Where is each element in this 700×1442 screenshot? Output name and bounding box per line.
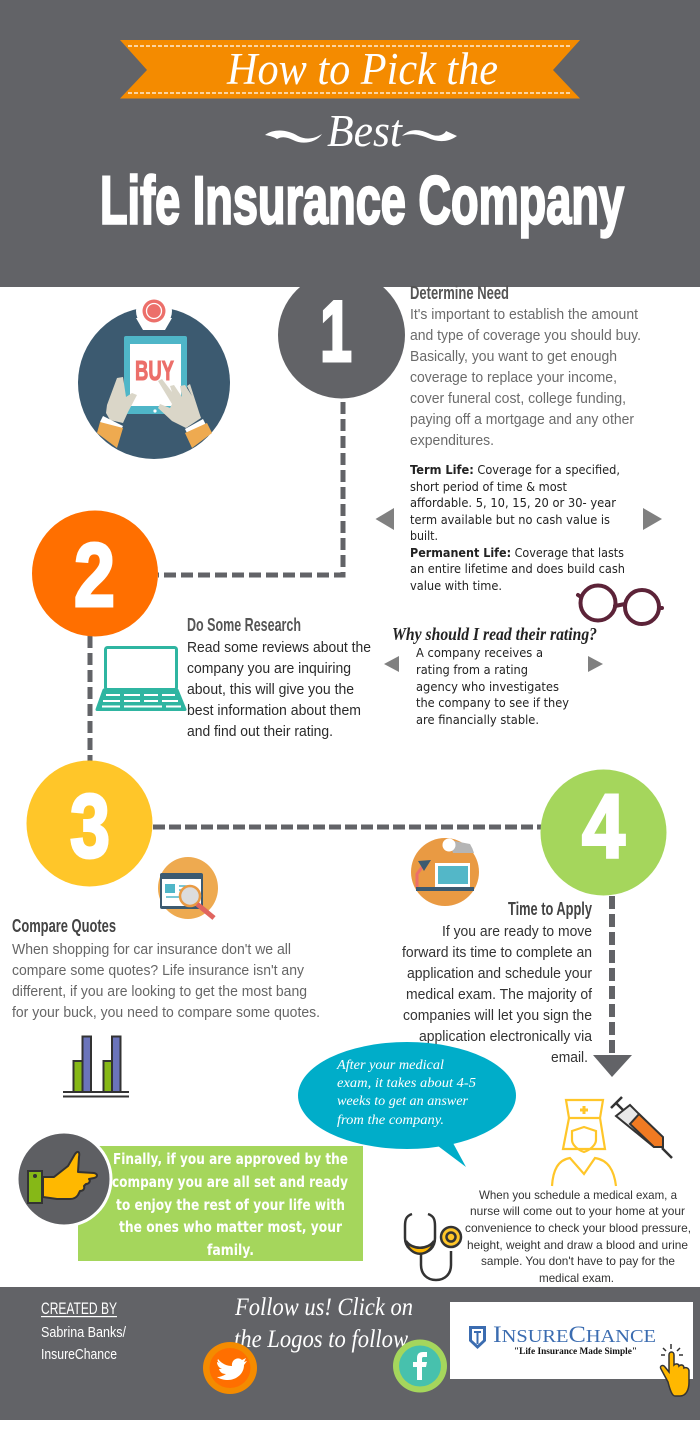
section 1: Determine Need: and type of coverage you should buy.: [410, 328, 641, 344]
section 1: Determine Need: Basically, you want to get enough: [410, 349, 617, 365]
section 2: Do Some Research: Do Some Research: [187, 615, 301, 635]
panel: final message: to enjoy the rest of your life with: [116, 1196, 345, 1214]
arrow: rating left: [384, 656, 399, 672]
credits: Sabrina Banks/: [41, 1324, 127, 1341]
icon: tablet buy: BUY: [135, 355, 174, 386]
panel: final message: company you are all set and ready: [112, 1173, 348, 1191]
arrow: left pointer: [376, 508, 394, 530]
section 1: Determine Need: Determine Need: [410, 283, 509, 303]
step 3 badge: [26, 760, 152, 886]
logo: InsureChance: "Life Insurance Made Simple": [514, 1346, 637, 1356]
title line 1: How to Pick the: [226, 44, 498, 94]
icon: tablet buy: [78, 293, 230, 459]
text block: medical exam: height, weight and draw a blood and urine: [467, 1238, 688, 1252]
section 2: Do Some Research: Read some reviews about the: [187, 640, 371, 656]
left hand: [106, 377, 137, 423]
icon: glasses: [578, 586, 662, 624]
arrow: right pointer: [643, 508, 662, 530]
section 1: Determine Need: expenditures.: [410, 433, 494, 449]
header band: [0, 0, 700, 287]
section 2: Do Some Research: [187, 615, 371, 740]
icon: nurse: [552, 1100, 616, 1186]
credits: [41, 1299, 127, 1363]
follow text: Follow us! Click on: [234, 1294, 413, 1321]
panel: final message: family.: [207, 1241, 254, 1259]
logo: InsureChance: INSURE CHANCE: [493, 1322, 656, 1347]
step 2 badge: [32, 510, 158, 636]
step 1 badge: [278, 272, 405, 398]
icon: twitter: [203, 1342, 257, 1394]
section 4: Time to Apply: [402, 899, 593, 1066]
connector: step 3 to 4: [153, 824, 541, 830]
section 4: Time to Apply: If you are ready to move: [442, 924, 592, 940]
credits: CREATED BY: [41, 1299, 117, 1318]
rating question: the company to see if they: [416, 695, 570, 710]
title line 2 with flourishes: [265, 105, 457, 156]
callout: speech bubble: [298, 1042, 516, 1167]
text block: term and permanent life: Term Life: Coverage for a specified,: [410, 462, 620, 477]
icon: facebook: [393, 1340, 447, 1392]
icon: desk and laptop: [411, 838, 479, 906]
section 1: Determine Need: It's important to establish the amount: [410, 307, 638, 323]
section 4: Time to Apply: forward its time to complete an: [402, 945, 592, 961]
icon: pointing hand: [660, 1344, 689, 1396]
logo: InsureChance: [450, 1302, 693, 1379]
icon: web search: [158, 857, 218, 919]
section 4: Time to Apply: medical exam. The majority of: [406, 987, 593, 1003]
section 3: Compare Quotes: different, if you are looking to get the most bang: [12, 984, 307, 1000]
footer band: [0, 1287, 700, 1420]
section 3: Compare Quotes: compare some quotes? Life insurance isn't any: [12, 963, 305, 979]
text block: term and permanent life: [410, 462, 625, 593]
icon: stethoscope: [405, 1214, 461, 1280]
step 3 badge: 3: [70, 777, 110, 877]
arrow: rating right: [588, 656, 603, 672]
section 1: Determine Need: paying off a mortgage and any other: [410, 412, 634, 428]
text block: medical exam: convenience to check your blood pressure,: [465, 1221, 691, 1235]
section 2: Do Some Research: and find out their rating.: [187, 724, 333, 740]
section 4: Time to Apply: email.: [551, 1050, 588, 1066]
rating question: A company receives a: [416, 645, 543, 660]
follow text: the Logos to follow.: [234, 1326, 412, 1353]
section 1: Determine Need: coverage to replace your income,: [410, 370, 617, 386]
section 4: Time to Apply: Time to Apply: [508, 899, 592, 919]
section 3: Compare Quotes: Compare Quotes: [12, 916, 116, 936]
section 4: Time to Apply: application and schedule your: [407, 966, 592, 982]
arrow: step 4 down: [593, 896, 632, 1077]
text block: term and permanent life: affordable. 5, 10, 15, 20 or 30- year: [410, 495, 617, 510]
section 2: Do Some Research: about, this will give you the: [187, 682, 354, 698]
follow text: [234, 1294, 413, 1353]
icon: thumbs up: [16, 1130, 112, 1228]
text block: term and permanent life: term available but no cash value is: [410, 512, 610, 527]
text block: term and permanent life: Permanent Life: Coverage that lasts: [410, 545, 624, 560]
rating question: rating from a rating: [416, 662, 528, 677]
ribbon banner: [120, 40, 580, 98]
section 3: Compare Quotes: for your buck, you need to compare some quotes.: [12, 1005, 320, 1021]
text block: term and permanent life: value with time.: [410, 578, 502, 593]
section 2: Do Some Research: company you are inquiring: [187, 661, 351, 677]
text block: medical exam: medical exam.: [539, 1271, 614, 1285]
panel: final message: Finally, if you are approved by the: [113, 1150, 348, 1168]
right hand: [158, 379, 201, 428]
section 3: Compare Quotes: When shopping for car insurance don't we all: [12, 942, 291, 958]
panel: final message: [78, 1146, 363, 1261]
callout: speech bubble: weeks to get an answer: [337, 1094, 469, 1109]
section 1: Determine Need: cover funeral cost, college funding,: [410, 391, 626, 407]
section 1: Determine Need: [410, 283, 641, 449]
icon: syringe: [611, 1097, 672, 1158]
step 1 badge: 1: [320, 284, 352, 380]
callout: speech bubble: exam, it takes about 4-5: [337, 1076, 476, 1091]
text block: medical exam: sample. You don't have to pay for the: [481, 1254, 675, 1268]
credits: InsureChance: [41, 1346, 117, 1363]
text block: medical exam: [465, 1188, 691, 1285]
rating question: Why should I read their rating?: [392, 624, 597, 644]
text block: medical exam: When you schedule a medical exam, a: [479, 1188, 677, 1202]
text block: medical exam: nurse will come out to your home at your: [470, 1204, 685, 1218]
connector: step 2 to 3: [88, 636, 92, 762]
section 2: Do Some Research: best information about them: [187, 703, 361, 719]
panel: final message: the ones who matter most, your: [119, 1218, 342, 1236]
section 4: Time to Apply: application electronically via: [419, 1029, 593, 1045]
title line 2 with flourishes: Best: [327, 105, 403, 156]
connector: step 1 to 2: [158, 402, 343, 575]
text block: term and permanent life: an entire lifetime and does build cash: [410, 561, 625, 576]
text block: term and permanent life: built.: [410, 528, 438, 543]
callout: speech bubble: from the company.: [337, 1113, 444, 1128]
section 4: Time to Apply: companies will let you sign the: [403, 1008, 592, 1024]
callout: speech bubble: After your medical: [336, 1058, 444, 1073]
step 4 badge: [540, 770, 666, 896]
icon: bar chart: [63, 1036, 129, 1096]
icon: laptop: [97, 648, 185, 710]
rating question: agency who investigates: [416, 679, 559, 694]
section 3: Compare Quotes: [12, 916, 320, 1021]
step 4 badge: 4: [582, 777, 625, 877]
rating question: [392, 624, 597, 727]
text block: term and permanent life: short period of time & most: [410, 479, 567, 494]
step 2 badge: 2: [74, 526, 115, 626]
rating question: are financially stable.: [416, 712, 539, 727]
gear: [136, 293, 172, 330]
